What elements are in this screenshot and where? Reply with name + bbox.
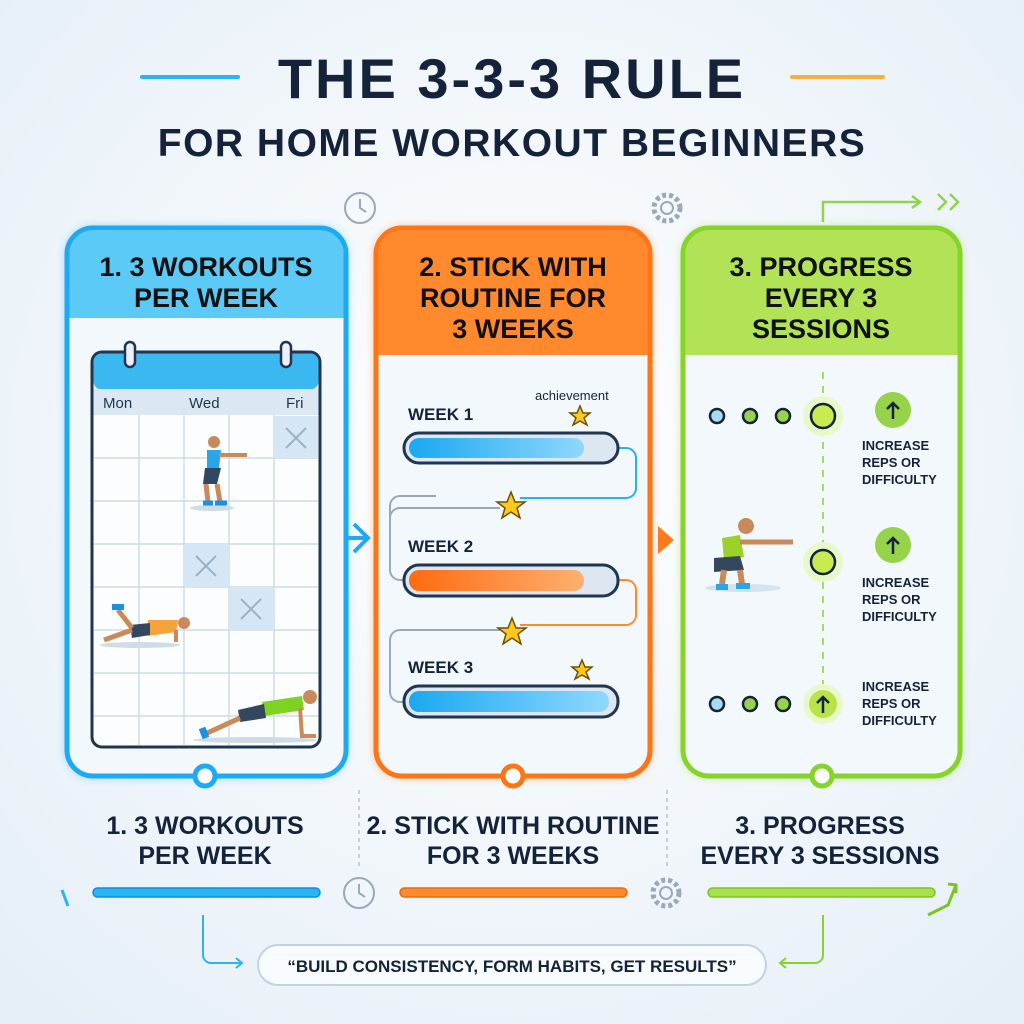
- icon: squat person green: [705, 518, 793, 592]
- increase 2: REPS OR: [862, 592, 921, 607]
- title: [140, 47, 885, 165]
- panel: stick with routine: [376, 228, 650, 776]
- week 1 bar: achievement: [535, 388, 609, 403]
- icon: gear top: [654, 195, 680, 221]
- icon: plank person: [193, 690, 317, 743]
- calendar: [92, 342, 320, 747]
- increase 3: [862, 679, 937, 728]
- panel: progress: [683, 228, 960, 776]
- session dots row 1: [710, 396, 843, 436]
- panel: progress: EVERY 3: [765, 283, 877, 313]
- increase 3: INCREASE: [862, 679, 930, 694]
- callout: quote: [258, 945, 766, 985]
- increase 1: DIFFICULTY: [862, 472, 937, 487]
- bottom labels: 2. STICK WITH ROUTINE: [366, 812, 660, 840]
- icon: clock top: [345, 193, 375, 223]
- increase 3: REPS OR: [862, 696, 921, 711]
- session dots row 3: [710, 684, 843, 724]
- title: THE 3-3-3 RULE: [278, 47, 746, 110]
- panel nodes: [195, 766, 832, 786]
- session ring 2: [803, 542, 843, 582]
- icon: kneeling pushup: [100, 607, 190, 648]
- panel: stick with routine: 3 WEEKS: [452, 314, 574, 344]
- heading: 3. PROGRESS: [729, 252, 913, 282]
- week 1 bar: WEEK 1: [408, 405, 473, 424]
- week 2 bar: WEEK 2: [408, 537, 473, 556]
- heading: 1. 3 WORKOUTS: [99, 252, 313, 282]
- panel: 3 workouts: [67, 228, 346, 776]
- icon: clock bottom: [344, 878, 374, 908]
- week 1 bar: [404, 388, 618, 463]
- panel: 3 workouts: PER WEEK: [134, 283, 279, 313]
- icon: squat person: [190, 436, 247, 511]
- bottom labels: PER WEEK: [138, 842, 272, 870]
- increase 1: [862, 392, 937, 487]
- progress lines: [62, 884, 956, 915]
- connectors: [390, 448, 636, 702]
- arrows to quote: [203, 915, 823, 968]
- bottom labels: 3. PROGRESS: [735, 812, 905, 840]
- week 3 bar: [404, 658, 618, 717]
- icon: gear bottom: [653, 880, 679, 906]
- arrow: panel 1 to 2: [346, 524, 368, 552]
- title: FOR HOME WORKOUT BEGINNERS: [158, 122, 866, 165]
- bottom labels: EVERY 3 SESSIONS: [700, 842, 940, 870]
- calendar: Mon: [103, 395, 132, 412]
- calendar: Fri: [286, 395, 304, 412]
- panel: progress: SESSIONS: [752, 314, 890, 344]
- increase 2: DIFFICULTY: [862, 609, 937, 624]
- week 3 bar: WEEK 3: [408, 658, 473, 677]
- heading: 2. STICK WITH: [419, 252, 607, 282]
- calendar: Wed: [189, 395, 220, 412]
- callout: quote: “BUILD CONSISTENCY, FORM HABITS, GET RESULTS”: [287, 957, 737, 976]
- increase 3: DIFFICULTY: [862, 713, 937, 728]
- panel: stick with routine: ROUTINE FOR: [420, 283, 606, 313]
- icon: stars: [497, 406, 592, 679]
- arrow: panel 2 to 3: [658, 526, 674, 554]
- bottom labels: FOR 3 WEEKS: [427, 842, 599, 870]
- increase 1: INCREASE: [862, 438, 930, 453]
- increase 1: REPS OR: [862, 455, 921, 470]
- arrow: top right: [823, 194, 958, 222]
- bottom labels: [106, 812, 940, 870]
- increase 2: INCREASE: [862, 575, 930, 590]
- week 2 bar: [404, 537, 618, 596]
- bottom labels: 1. 3 WORKOUTS: [106, 812, 304, 840]
- increase 2: [862, 527, 937, 624]
